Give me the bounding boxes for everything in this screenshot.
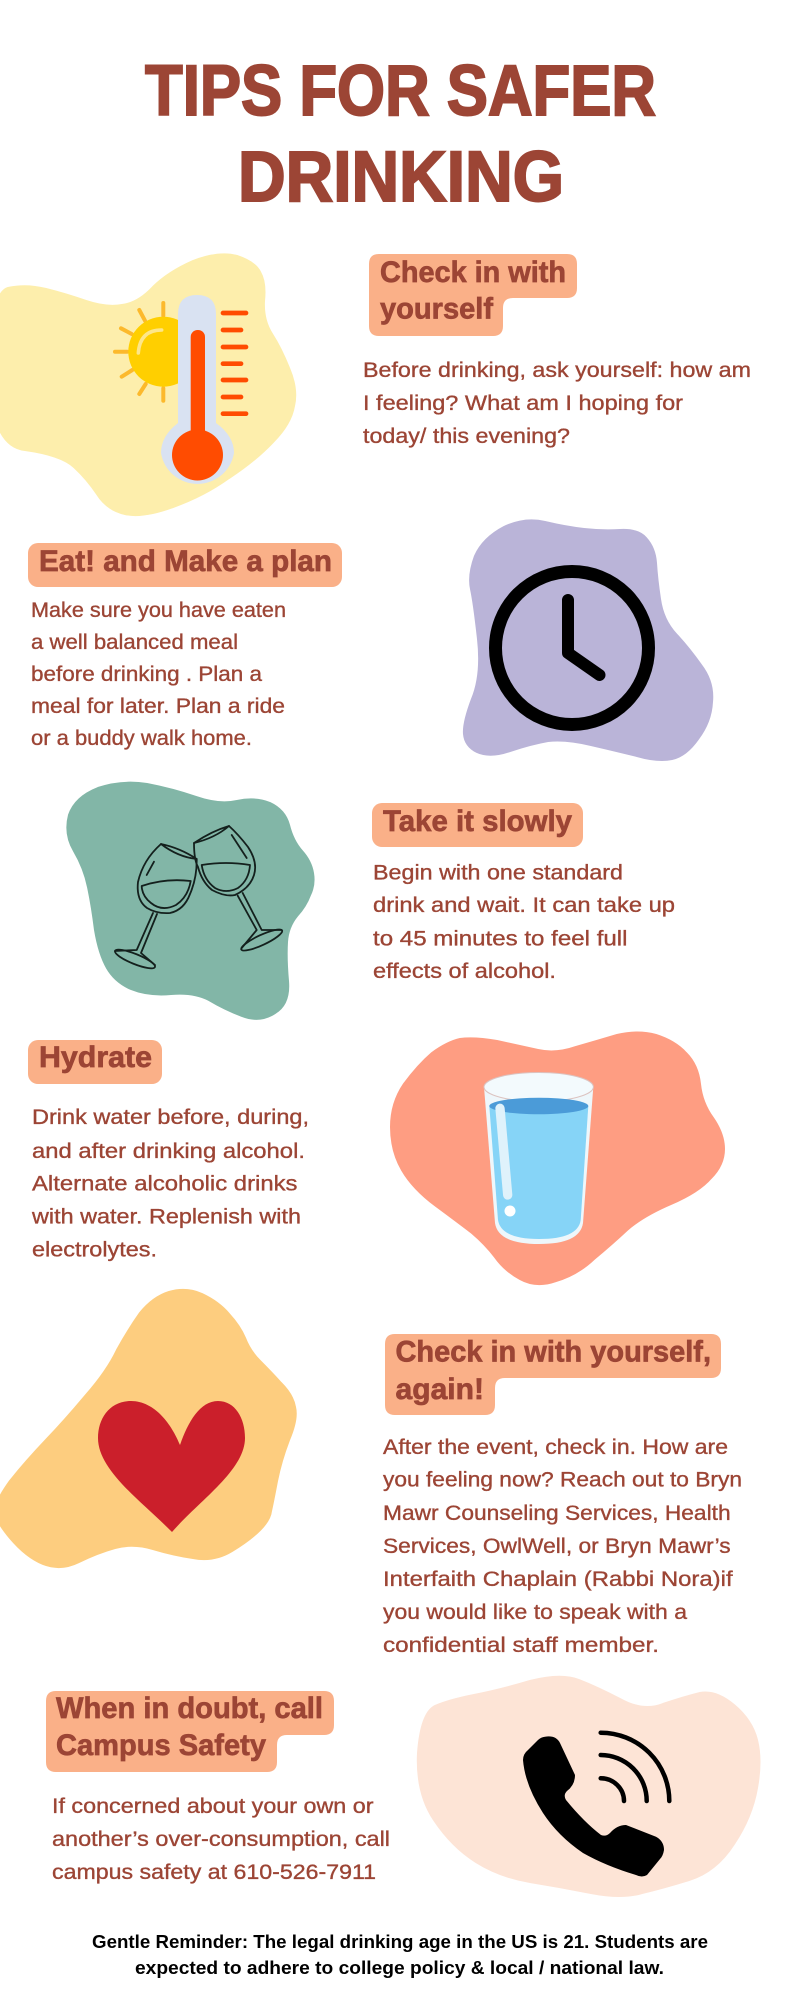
- text: check in again body: [383, 1436, 742, 1657]
- icon: heart: [98, 1401, 245, 1532]
- text: check in again body: Mawr Counseling Services, Health: [383, 1502, 731, 1525]
- text: hydrate body: Alternate alcoholic drinks: [32, 1172, 298, 1196]
- peach blob: [418, 1677, 760, 1896]
- heading: take it slowly: [372, 803, 583, 847]
- text: check in again body: you would like to speak with a: [383, 1601, 687, 1624]
- title: DRINKING: [238, 138, 564, 217]
- icon: clinking wine glasses: [113, 826, 284, 972]
- heading: check in with yourself: yourself: [380, 292, 494, 326]
- panel: take it slowly: [67, 783, 675, 1019]
- text: eat body: meal for later. Plan a ride: [31, 695, 285, 718]
- text: eat body: before drinking . Plan a: [31, 663, 262, 686]
- coral blob: [391, 1032, 724, 1284]
- text: hydrate body: and after drinking alcohol.: [32, 1140, 305, 1163]
- panel: when in doubt: [46, 1677, 760, 1896]
- heading: take it slowly: Take it slowly: [383, 805, 572, 838]
- yellow blob: [0, 254, 295, 515]
- icon: sun: [115, 303, 198, 401]
- heading: check in with yourself, again: again!: [396, 1373, 484, 1406]
- illustration: clock: [464, 520, 712, 760]
- text: when in doubt body: another’s over-consumption, call: [52, 1828, 390, 1851]
- illustration: heart: [0, 1290, 296, 1567]
- heading: eat and make a plan: Eat! and Make a plan: [39, 545, 332, 578]
- text: when in doubt body: If concerned about your own or: [52, 1795, 374, 1818]
- title: TIPS FOR SAFER: [145, 52, 656, 131]
- text: hydrate body: [31, 1106, 309, 1262]
- icon: phone handset with signal arcs: [523, 1733, 669, 1876]
- text: take it slowly body: [373, 862, 675, 983]
- text: hydrate body: with water. Replenish with: [31, 1206, 301, 1228]
- icon: water glass: [484, 1072, 593, 1244]
- text: eat body: a well balanced meal: [31, 631, 238, 654]
- teal blob: [67, 783, 314, 1019]
- panel: eat and make a plan: [28, 520, 712, 760]
- footer: gentle reminder: [92, 1931, 708, 1978]
- icon: thermometer: [161, 295, 246, 484]
- illustration: thermometer and sun: [0, 254, 295, 515]
- text: when in doubt body: campus safety at 610-526-7911: [52, 1861, 376, 1884]
- text: take it slowly body: effects of alcohol.: [373, 960, 556, 983]
- panel: check in with yourself: [0, 254, 751, 515]
- text: check in again body: Interfaith Chaplain (Rabbi Nora)if: [383, 1568, 733, 1591]
- text: check in body: Before drinking, ask yourself: how am: [363, 359, 751, 382]
- text: check in again body: After the event, check in. How are: [383, 1436, 728, 1459]
- illustration: glass of water: [391, 1032, 724, 1284]
- text: check in body: [363, 359, 751, 448]
- icon: clock: [496, 572, 648, 724]
- heading: check in with yourself: [369, 254, 577, 336]
- text: take it slowly body: to 45 minutes to feel full: [373, 928, 628, 950]
- heading: when in doubt, call campus safety: [46, 1691, 334, 1772]
- text: eat body: [31, 599, 286, 750]
- text: eat body: or a buddy walk home.: [31, 727, 252, 750]
- text: check in again body: you feeling now? Reach out to Bryn: [383, 1469, 742, 1492]
- title: [145, 52, 656, 217]
- heading: when in doubt, call campus safety: Campus Safety: [56, 1729, 266, 1762]
- heading: check in with yourself, again: [385, 1334, 721, 1415]
- text: check in body: I feeling? What am I hoping for: [363, 392, 683, 415]
- heading: when in doubt, call campus safety: When in doubt, call: [56, 1692, 323, 1725]
- footer: gentle reminder: Gentle Reminder: The legal drinking age in the US is 21. Students are: [92, 1931, 708, 1952]
- text: when in doubt body: [52, 1795, 390, 1884]
- text: check in body: today/ this evening?: [363, 425, 570, 448]
- text: check in again body: confidential staff member.: [383, 1634, 659, 1657]
- heading: hydrate: [28, 1040, 162, 1084]
- text: eat body: Make sure you have eaten: [31, 599, 286, 622]
- orange blob: [0, 1290, 296, 1567]
- text: hydrate body: Drink water before, during,: [32, 1106, 309, 1129]
- footer: gentle reminder: expected to adhere to college policy & local / national law.: [135, 1957, 664, 1978]
- text: take it slowly body: drink and wait. It can take up: [373, 894, 675, 917]
- text: take it slowly body: Begin with one standard: [373, 862, 623, 884]
- text: hydrate body: electrolytes.: [32, 1238, 157, 1262]
- heading: check in with yourself: Check in with: [380, 256, 566, 289]
- purple blob: [464, 520, 712, 760]
- illustration: telephone: [418, 1677, 760, 1896]
- text: check in again body: Services, OwlWell, or Bryn Mawr’s: [383, 1535, 731, 1558]
- heading: check in with yourself, again: Check in with yourself,: [396, 1336, 711, 1368]
- illustration: wine glasses: [67, 783, 314, 1019]
- heading: hydrate: Hydrate: [39, 1041, 152, 1074]
- panel: hydrate: [28, 1032, 724, 1284]
- panel: check in again: [0, 1290, 742, 1657]
